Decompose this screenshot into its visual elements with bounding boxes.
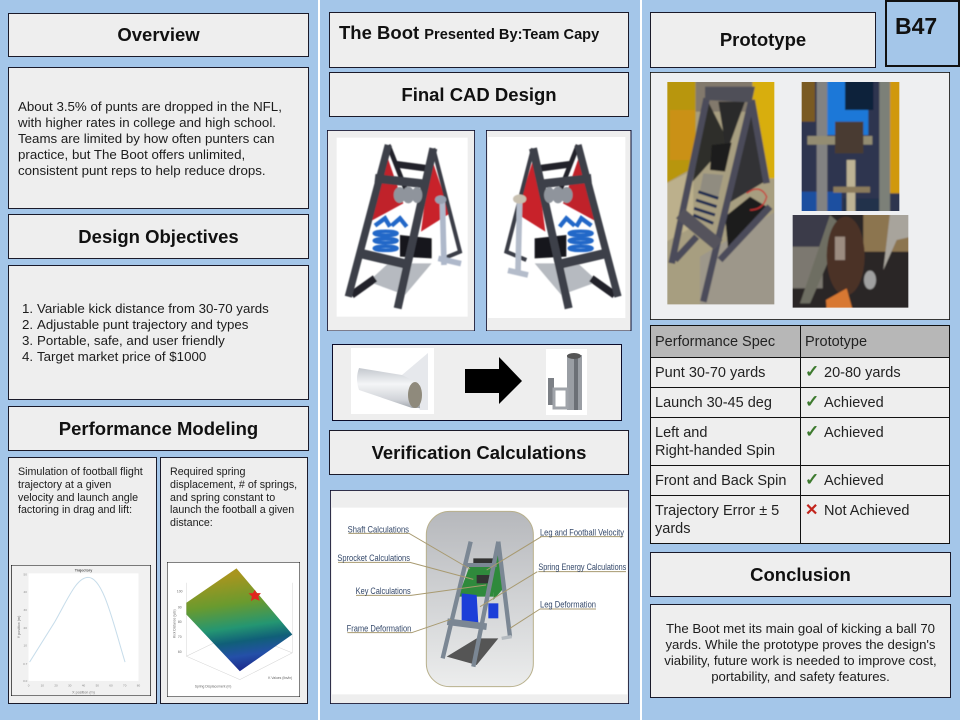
- text block: simulation description: factoring in drag and lift:: [18, 504, 132, 516]
- row: trajectory error: Trajectory Error ± 5: [655, 503, 779, 519]
- heading: overview: Overview: [117, 24, 200, 45]
- chart: trajectory: 40: [24, 590, 27, 594]
- row: handed spin: Left and: [655, 425, 707, 441]
- column divider left: [318, 0, 320, 720]
- badge: booth number: B47: [895, 13, 937, 39]
- text block: objectives list: Target market price of $1000: [37, 349, 206, 364]
- row: handed spin: Right-handed Spin: [655, 443, 775, 459]
- chart: trajectory: 0.7: [23, 662, 28, 666]
- row: trajectory error: ✕: [805, 502, 818, 519]
- heading: verification calculations: Verification Calculations: [372, 442, 586, 462]
- text block: conclusion: viability, future work is needed to improve cost,: [664, 653, 937, 668]
- image: cad render left: [327, 130, 475, 331]
- heading: conclusion: Conclusion: [750, 564, 851, 584]
- column divider right: [640, 0, 642, 720]
- heading: conclusion: [650, 552, 951, 597]
- icon: old part: [351, 348, 434, 414]
- callout labels: Key Calculations: [356, 586, 411, 596]
- chart: trajectory: [11, 565, 151, 696]
- text block: spring description: distance:: [170, 517, 213, 529]
- text block: spring description: [170, 466, 297, 529]
- callout lines: [338, 533, 626, 633]
- text block: objectives list: Portable, safe, and user friendly: [37, 333, 225, 348]
- arrow: redesign: [465, 357, 522, 404]
- text block: conclusion: yards. While the prototype proves the design's: [665, 637, 936, 652]
- row: handed spin: [650, 418, 950, 465]
- chart: spring surface: [167, 562, 300, 697]
- panel: prototype photos: [650, 72, 950, 320]
- text block: spring description: and spring constant to: [170, 492, 275, 504]
- row: handed spin: ✓: [805, 422, 819, 441]
- heading: performance modeling: [8, 406, 309, 451]
- row: launch angle: [650, 388, 950, 417]
- row: trajectory error: [650, 496, 950, 544]
- row: front and back spin: [650, 466, 950, 495]
- row: punt distance: ✓: [805, 362, 819, 381]
- chart: spring surface: 60: [178, 650, 182, 654]
- heading: final cad design: Final CAD Design: [401, 84, 557, 104]
- text block: overview: About 3.5% of punts are dropped in the NFL,: [18, 99, 282, 114]
- heading: poster title: [329, 12, 629, 68]
- text block: overview: [8, 67, 309, 209]
- callout labels: [337, 524, 627, 633]
- text block: simulation description: Simulation of football flight: [18, 466, 143, 478]
- heading: overview: [8, 13, 309, 57]
- text block: objectives list: [8, 265, 309, 400]
- panel: spring sizing: [160, 457, 308, 704]
- chart: spring surface: K Values (lbs/in): [268, 676, 292, 680]
- chart: trajectory: X position (m): [72, 690, 95, 694]
- header row: [650, 325, 950, 357]
- chart: trajectory: 30: [68, 683, 72, 687]
- row: launch angle: Launch 30-45 deg: [655, 395, 772, 411]
- callout labels: Frame Deformation: [347, 623, 411, 633]
- heading: poster title: The Boot Presented By:Team Capy: [339, 22, 599, 43]
- chart: trajectory: 10: [24, 644, 27, 648]
- image: verification diagram: [330, 490, 629, 704]
- row: launch angle: Achieved: [824, 395, 884, 411]
- text block: simulation description: [18, 466, 143, 516]
- text block: objectives list: 2.: [22, 317, 33, 332]
- chart: trajectory: 80: [137, 683, 140, 687]
- icon: frame with highlighted parts: [443, 542, 512, 667]
- row: front and back spin: Achieved: [824, 473, 884, 489]
- chart: trajectory: 60: [109, 683, 113, 687]
- image: prototype full view: [663, 78, 778, 308]
- text block: spring description: Required spring: [170, 466, 245, 478]
- chart: trajectory: 50: [96, 683, 99, 687]
- row: trajectory error: Not Achieved: [824, 503, 909, 519]
- text block: objectives list: Adjustable punt trajectory and types: [37, 317, 248, 332]
- text block: spring description: launch the football a given: [170, 504, 294, 516]
- row: punt distance: 20-80 yards: [824, 365, 901, 381]
- image: cad render right: [486, 130, 632, 331]
- header row: Prototype: [805, 334, 867, 350]
- text block: objectives list: 4.: [22, 349, 33, 364]
- text block: objectives list: 3.: [22, 333, 33, 348]
- heading: prototype: Prototype: [720, 29, 806, 50]
- row: front and back spin: Front and Back Spin: [655, 473, 786, 489]
- table: performance specs: [650, 325, 950, 544]
- header row: Performance Spec: [655, 334, 775, 350]
- row: trajectory error: yards: [655, 521, 690, 537]
- text block: spring description: displacement, # of springs,: [170, 479, 297, 491]
- row: launch angle: ✓: [805, 392, 819, 411]
- text block: simulation description: trajectory at a given: [18, 479, 111, 491]
- text block: conclusion: The Boot met its main goal of kicking a ball 70: [666, 621, 935, 636]
- chart: trajectory: 0: [28, 683, 30, 687]
- chart: trajectory: 20: [24, 626, 27, 630]
- text block: overview: Teams are limited by how often punters can: [18, 131, 274, 146]
- text block: overview: with higher rates in college and high school.: [18, 115, 276, 130]
- badge: booth number: [885, 0, 960, 67]
- row: front and back spin: ✓: [805, 470, 819, 489]
- row: handed spin: Achieved: [824, 425, 884, 441]
- heading: design objectives: [8, 214, 309, 259]
- row: punt distance: Punt 30-70 yards: [655, 365, 765, 381]
- text block: objectives list: Variable kick distance from 30-70 yards: [37, 301, 269, 316]
- chart: spring surface: 90: [178, 605, 182, 609]
- chart: trajectory: 40: [82, 683, 86, 687]
- callout labels: Shaft Calculations: [348, 524, 409, 534]
- chart: spring surface: Spring Displacement (m): [195, 684, 231, 688]
- chart: trajectory: 20: [54, 683, 58, 687]
- text block: objectives list: 1.: [22, 301, 33, 316]
- chart: trajectory: 0.0: [23, 679, 28, 683]
- heading: verification calculations: [329, 430, 629, 475]
- chart: trajectory: Y position (m): [17, 616, 21, 638]
- heading: prototype: [650, 12, 876, 68]
- image: prototype close-up: [802, 82, 900, 211]
- chart: trajectory: 10: [41, 683, 44, 687]
- row: punt distance: [650, 358, 950, 387]
- heading: performance modeling: Performance Modeling: [59, 418, 258, 438]
- chart: spring surface: 70: [178, 635, 182, 639]
- icon: new part: [546, 349, 587, 415]
- chart: spring surface: Kick Distance (yds): [172, 609, 176, 638]
- callout labels: Leg Deformation: [540, 600, 596, 610]
- panel: part redesign strip: [332, 344, 622, 421]
- chart: spring surface: 80: [178, 620, 182, 624]
- text block: overview: consistent punt reps to help reduce drops.: [18, 163, 266, 178]
- text block: conclusion: [650, 604, 951, 698]
- chart: trajectory: 30: [24, 608, 27, 612]
- text block: conclusion: portability, and safety features.: [711, 669, 890, 684]
- callout labels: Sprocket Calculations: [337, 553, 410, 563]
- chart: trajectory: Trajectory: [75, 569, 93, 573]
- panel: trajectory simulation: [8, 457, 157, 704]
- text block: simulation description: velocity and launch angle: [18, 492, 138, 504]
- heading: final cad design: [329, 72, 629, 117]
- text block: overview: practice, but The Boot offers unlimited,: [18, 147, 245, 162]
- image: football on tee: [792, 215, 908, 308]
- chart: trajectory: 50: [24, 572, 27, 576]
- chart: spring surface: 100: [177, 590, 183, 594]
- chart: trajectory: 70: [123, 683, 127, 687]
- heading: design objectives: Design Objectives: [78, 226, 239, 246]
